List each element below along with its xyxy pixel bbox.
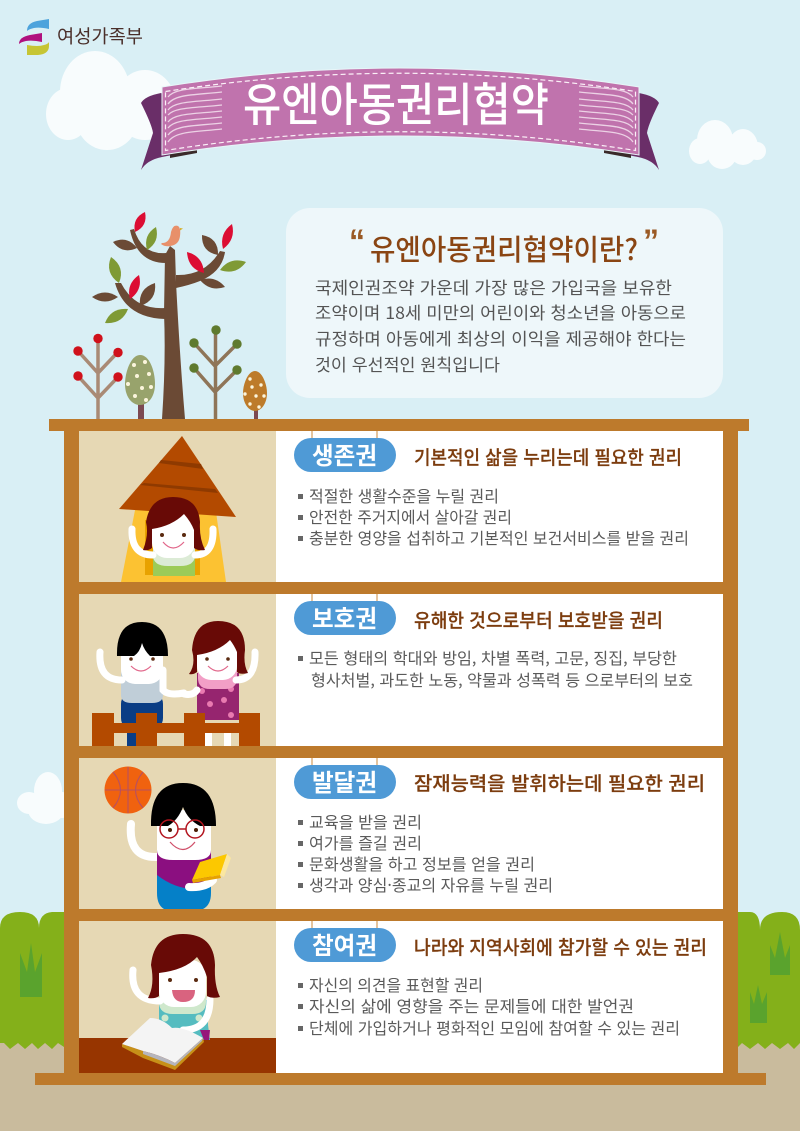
bullet list: 생각과 양심·종교의 자유를 누릴 권리 — [309, 872, 553, 896]
badge: 보호권 — [312, 599, 377, 634]
heading: 기본적인 삶을 누리는데 필요한 권리 — [414, 443, 682, 470]
illustration: girl in house — [119, 436, 236, 582]
bullet list: 여가를 즐길 권리 — [309, 830, 422, 854]
ground — [0, 1040, 800, 1131]
ribbon band — [162, 68, 639, 155]
panel: 발달권 development rights — [294, 758, 705, 896]
intro body text — [315, 274, 686, 376]
bullet list — [298, 809, 553, 896]
glasses — [160, 820, 204, 838]
bullet list: 자신의 삶에 영향을 주는 문제들에 대한 발언권 — [309, 993, 634, 1017]
heading: 잠재능력을 발휘하는데 필요한 권리 — [414, 769, 705, 796]
fence — [92, 713, 260, 746]
bullet list — [298, 972, 680, 1039]
basketball — [104, 766, 152, 814]
badge — [294, 921, 396, 962]
badge — [294, 758, 396, 799]
badge: 참여권 — [312, 926, 377, 961]
leaves — [134, 212, 146, 232]
heading: 유해한 것으로부터 보호받을 권리 — [414, 606, 663, 633]
bullet list: 단체에 가입하거나 평화적인 모임에 참여할 수 있는 권리 — [309, 1015, 680, 1039]
small tree: red berries — [73, 334, 123, 419]
left bushes — [0, 912, 70, 1049]
house roof — [119, 436, 236, 517]
small tree: green berries — [189, 325, 242, 419]
girl — [153, 553, 195, 576]
arm holding book — [189, 880, 213, 887]
heading: 나라와 지역사회에 참가할 수 있는 권리 — [414, 933, 707, 960]
ribbon wavy lines — [168, 86, 633, 142]
bullet list — [298, 645, 693, 691]
panel: 참여권 participation rights — [294, 921, 707, 1039]
title ribbon — [141, 68, 659, 170]
ribbon title text: 유엔아동권리협약 — [243, 69, 549, 135]
logo: 여성가족부 — [19, 19, 143, 55]
badge: 발달권 — [312, 763, 377, 798]
closing quote mark: ” — [643, 223, 659, 259]
bullet list: 문화생활을 하고 정보를 얻을 권리 — [309, 851, 535, 875]
small tree: orange egg — [243, 371, 267, 419]
ribbon left tail — [141, 93, 197, 170]
small tree: olive egg — [125, 355, 155, 419]
cloud: lower left — [17, 772, 74, 824]
badge — [294, 594, 396, 635]
bullet list: 형사처벌, 과도한 노동, 약물과 성폭력 등 으로부터의 보호 — [311, 667, 693, 691]
bird — [161, 226, 183, 246]
boy — [100, 622, 184, 746]
illustration: boy and girl behind fence — [92, 621, 260, 746]
ribbon right tail — [603, 93, 659, 170]
cloud: upper left — [46, 51, 176, 150]
grass tuft right top — [770, 932, 790, 975]
right bushes — [730, 912, 800, 1049]
logo wordmark: 여성가족부 — [57, 23, 143, 49]
intro body text: 것이 우선적인 원칙입니다 — [315, 351, 500, 376]
bullet list: 교육을 받을 권리 — [309, 809, 422, 833]
bullet list: 충분한 영양을 섭취하고 기본적인 보건서비스를 받을 권리 — [309, 525, 689, 549]
grass tuft right bottom — [750, 985, 767, 1023]
panel: intro speech bubble — [286, 208, 723, 398]
bullet list: 안전한 주거지에서 살아갈 권리 — [309, 504, 512, 528]
bullet list: 자신의 의견을 표현할 권리 — [309, 972, 483, 996]
intro body text: 국제인권조약 가운데 가장 많은 가입국을 보유한 — [315, 274, 672, 299]
bullet list — [298, 483, 689, 549]
big tree — [92, 212, 246, 419]
intro heading: 유엔아동권리협약이란? — [370, 227, 638, 269]
illustration: boy with basketball and book — [104, 766, 231, 909]
cloud: upper right — [689, 120, 766, 169]
illustration: girl reading at table — [79, 934, 276, 1073]
panel: 보호권 protection rights — [294, 594, 693, 691]
bullet list: 모든 형태의 학대와 방임, 차별 폭력, 고문, 징집, 부당한 — [309, 645, 677, 669]
building frame — [35, 419, 766, 1085]
girl — [184, 621, 255, 746]
opening quote mark: “ — [349, 223, 365, 259]
panel: 생존권 survival rights — [294, 431, 689, 549]
badge: 생존권 — [312, 436, 377, 471]
open book — [122, 1018, 204, 1070]
intro body text: 규정하며 아동에게 최상의 이익을 제공해야 한다는 — [315, 325, 686, 350]
intro body text: 조약이며 18세 미만의 어린이와 청소년을 아동으로 — [315, 299, 686, 324]
bullet list: 적절한 생활수준을 누릴 권리 — [309, 483, 499, 507]
badge — [294, 431, 396, 472]
grass tuft left — [20, 943, 42, 997]
book — [192, 854, 231, 883]
